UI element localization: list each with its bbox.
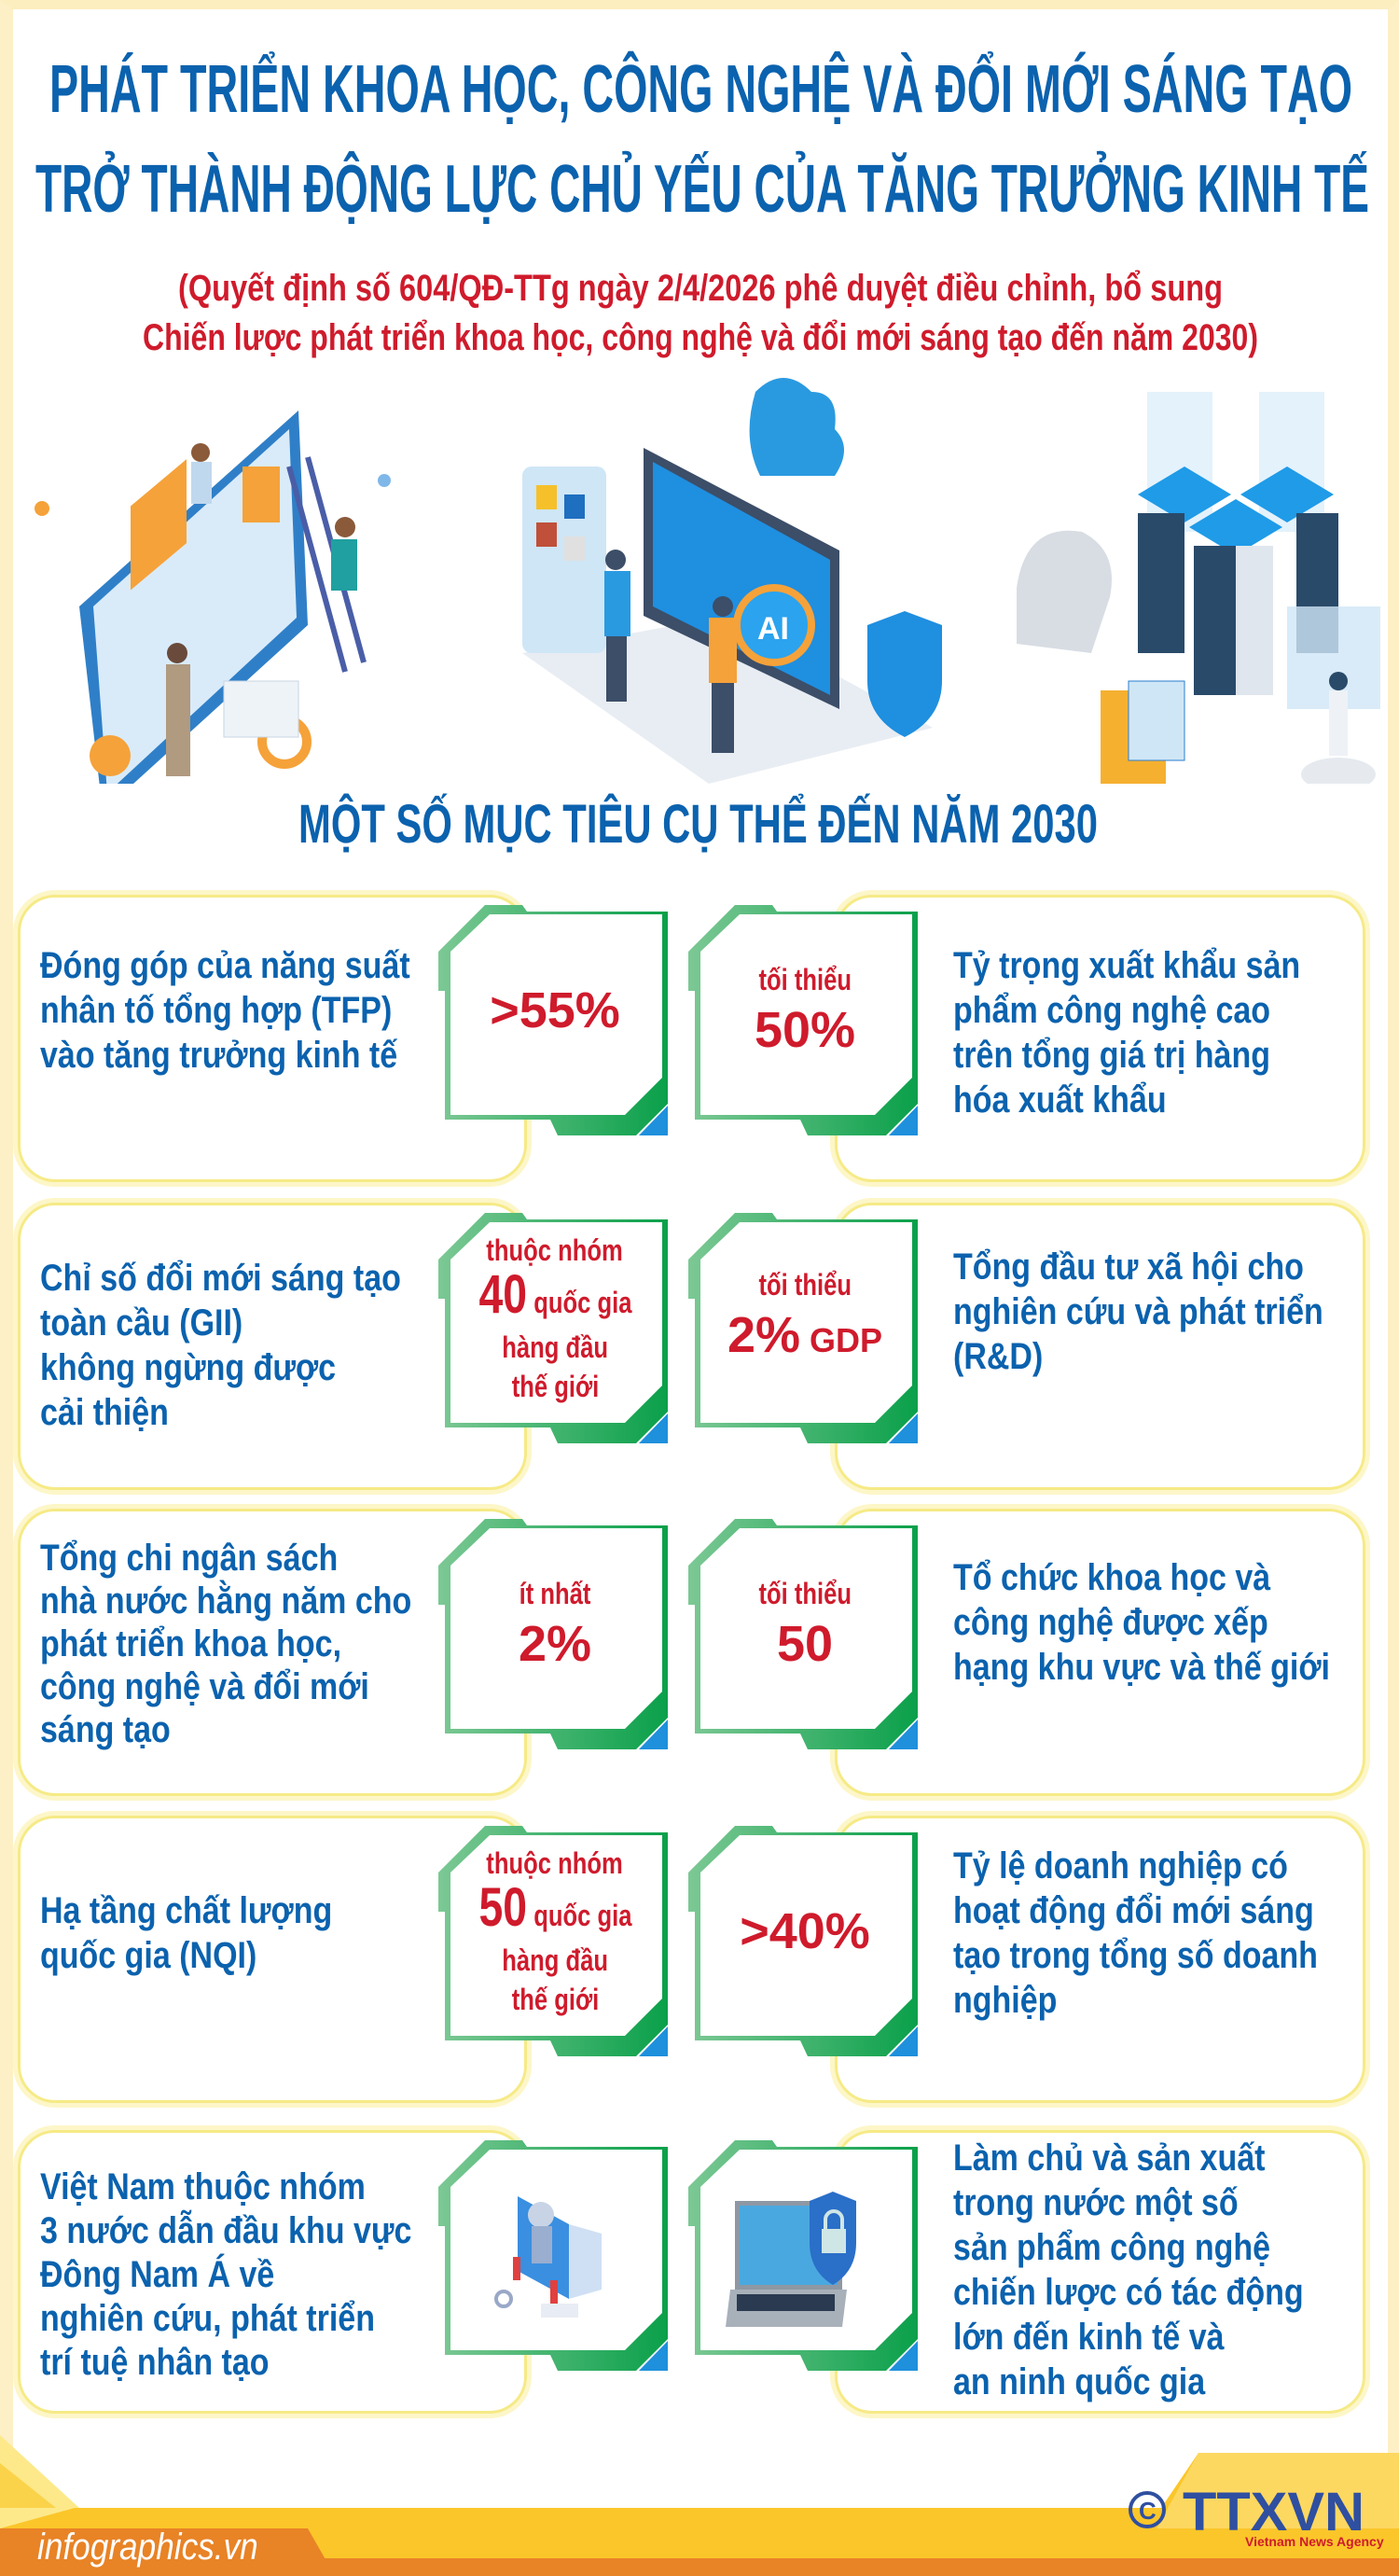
text: enterprises: hoạt động đổi mới sáng [953,1890,1314,1931]
text: GII: cải thiện [40,1392,169,1433]
text: budget: sáng tạo [40,1709,171,1750]
logo: TTXVN: TTXVN [1183,2482,1364,2542]
text: NQI: quốc gia (NQI) [40,1935,256,1976]
box: >40% [688,1826,918,2056]
box: tối thiểu 50 [688,1519,918,1749]
box: tối thiểu 50: 50 [777,1616,833,1672]
panel: right card strategic tech [835,2130,1365,2414]
box: top 40: hàng đầu [502,1330,608,1364]
icon: right servers [1017,392,1380,791]
text: strategic tech: lớn đến kinh tế và [953,2317,1225,2358]
box: top 50: thuộc nhóm [487,1845,623,1879]
panel: left card AI [18,2130,527,2414]
text: organizations: công nghệ được xếp [953,1602,1268,1643]
logo: TTXVN: Vietnam News Agency [1245,2534,1384,2549]
row 5 [13,2125,1370,2418]
icon: left monitor with people [35,411,391,812]
text: TFP [40,945,410,1076]
text: strategic tech: sản phẩm công nghệ [953,2227,1270,2268]
text: budget: công nghệ và đổi mới [40,1666,369,1707]
text: GII: Chỉ số đổi mới sáng tạo [40,1258,401,1299]
heading: MỘT SỐ MỤC TIÊU CỤ THỂ ĐẾN NĂM 2030 [298,794,1098,855]
row 2 [13,1198,1370,1495]
box: laptop lock icon [688,2140,918,2371]
panel: left card GII [18,1203,527,1490]
box: 2% GDP: tối thiểu [758,1267,852,1301]
panel: right card organizations [835,1509,1365,1796]
text: TFP: Đóng góp của năng suất [40,945,410,986]
text: R&D [953,1246,1323,1377]
box: top 50 [438,1826,668,2056]
text: enterprises [953,1845,1318,2021]
box: tối thiểu 50% [688,905,918,1135]
box: top 50: 50 quốc gia [478,1877,631,1937]
text: TFP: nhân tố tổng hợp (TFP) [40,990,392,1031]
box: tối thiểu 50: tối thiểu [758,1577,852,1610]
box: top 40 [438,1213,668,1443]
text: export: hóa xuất khẩu [953,1079,1167,1121]
text: R&D: nghiên cứu và phát triển [953,1291,1323,1332]
text: R&D: (R&D) [953,1336,1043,1377]
panel: left card NQI [18,1816,527,2103]
box: top 40: thuộc nhóm [487,1233,623,1267]
text: strategic tech: Làm chủ và sản xuất [953,2137,1265,2179]
text: enterprises: nghiệp [953,1980,1057,2021]
footer: infographics.vn: infographics.vn [37,2527,258,2568]
box: AI robot icon [438,2140,668,2371]
panel: left card TFP [18,895,527,1182]
text: NQI [40,1890,332,1976]
text: AI [40,2166,411,2383]
text: strategic tech: an ninh quốc gia [953,2361,1205,2402]
box: top 40: 40 quốc gia [478,1263,631,1325]
text: organizations: Tổ chức khoa học và [953,1557,1270,1598]
text: AI: 3 nước dẫn đầu khu vực [40,2210,411,2251]
panel: right card enterprises [835,1816,1365,2103]
text: GII [40,1258,401,1433]
box: tối thiểu 50%: 50% [755,1002,855,1058]
text: AI: Việt Nam thuộc nhóm [40,2166,366,2207]
text: R&D: Tổng đầu tư xã hội cho [953,1246,1304,1288]
text: strategic tech [953,2137,1304,2402]
box: ít nhất 2%: ít nhất [519,1577,590,1610]
text: GII: toàn cầu (GII) [40,1302,242,1344]
text: export: Tỷ trọng xuất khẩu sản [953,945,1300,986]
text: budget: phát triển khoa học, [40,1623,341,1664]
text: strategic tech: trong nước một số [953,2182,1239,2223]
text: enterprises: tạo trong tổng số doanh [953,1935,1318,1976]
icon: center AI screen [522,378,942,784]
box: top 50: hàng đầu [502,1942,608,1976]
box: ít nhất 2% [438,1519,668,1749]
icon: center AI screen: AI [757,611,789,647]
box: 2% GDP [688,1213,918,1443]
box: 2% GDP: 2% GDP [727,1306,882,1362]
box: top 50: thế giới [511,1982,599,2015]
panel: left card budget [18,1509,527,1796]
text: budget [40,1538,411,1750]
text: export: trên tổng giá trị hàng [953,1035,1270,1076]
row 1 [13,890,1370,1187]
text: export: phẩm công nghệ cao [953,990,1270,1031]
text: AI: trí tuệ nhân tạo [40,2342,270,2383]
box: >55%: >55% [490,982,620,1037]
text: AI: nghiên cứu, phát triển [40,2298,375,2339]
text: TFP: vào tăng trưởng kinh tế [40,1035,397,1076]
logo: TTXVN [1129,2482,1384,2549]
row 3 [13,1504,1370,1801]
illustrations [35,378,1380,784]
box: >55% [438,905,668,1135]
footer band [0,2435,1399,2576]
text: organizations [953,1557,1330,1688]
text: AI: Đông Nam Á về [40,2254,274,2295]
title [35,50,1369,358]
text: export [953,945,1300,1121]
box: ít nhất 2%: 2% [519,1616,591,1672]
panel: right card export [835,895,1365,1182]
text: budget: nhà nước hằng năm cho [40,1580,411,1622]
text: strategic tech: chiến lược có tác động [953,2272,1304,2313]
box: top 40: thế giới [511,1370,599,1403]
box: >40%: >40% [740,1903,870,1959]
text: budget: Tổng chi ngân sách [40,1538,338,1579]
row 4 [13,1811,1370,2108]
text: NQI: Hạ tầng chất lượng [40,1890,332,1931]
logo: TTXVN: C [1139,2497,1157,2525]
text: GII: không ngừng được [40,1347,336,1388]
text: enterprises: Tỷ lệ doanh nghiệp có [953,1845,1288,1887]
panel: right card R&D [835,1203,1365,1490]
text: organizations: hạng khu vực và thế giới [953,1647,1330,1688]
box: tối thiểu 50%: tối thiểu [758,963,852,996]
